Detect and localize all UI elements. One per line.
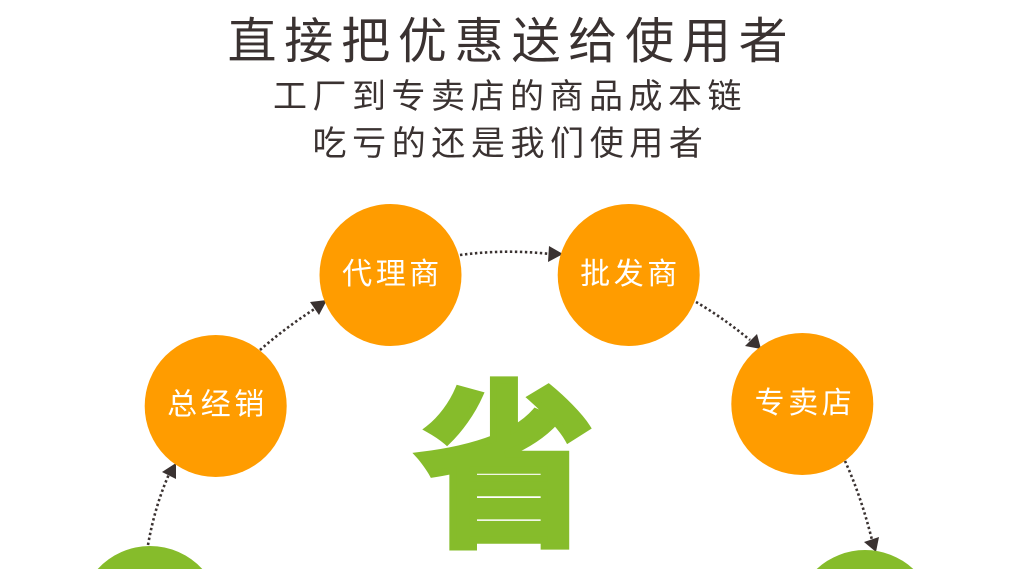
arrow: store to consumer [845, 461, 879, 552]
node: 总经销: 总经销 [167, 388, 268, 422]
title: 直接把优惠送给使用者 [227, 15, 796, 69]
node: 批发商: 批发商 [580, 258, 681, 291]
subtitle line 2: 吃亏的还是我们使用者 [312, 125, 708, 163]
arrow: agent to wholesaler [460, 246, 563, 262]
arrow: factory to distributor [148, 463, 176, 545]
subtitle line 1: 工厂到专卖店的商品成本链 [273, 78, 747, 116]
node: 专卖店: 专卖店 [755, 387, 855, 420]
big green character: 省 [416, 370, 594, 569]
node: 代理商: 代理商 [342, 258, 443, 291]
arrow: wholesaler to store [696, 302, 761, 349]
node: 批发商 [558, 204, 700, 346]
node: 总经销 [145, 335, 287, 477]
node: 专卖店 [731, 333, 873, 475]
header text block [227, 15, 796, 163]
node: consumer circle (green, cropped) [817, 550, 913, 569]
arrow: distributor to agent [260, 300, 327, 350]
node: 代理商 [320, 204, 462, 346]
node: factory circle (green, cropped) [98, 546, 202, 569]
